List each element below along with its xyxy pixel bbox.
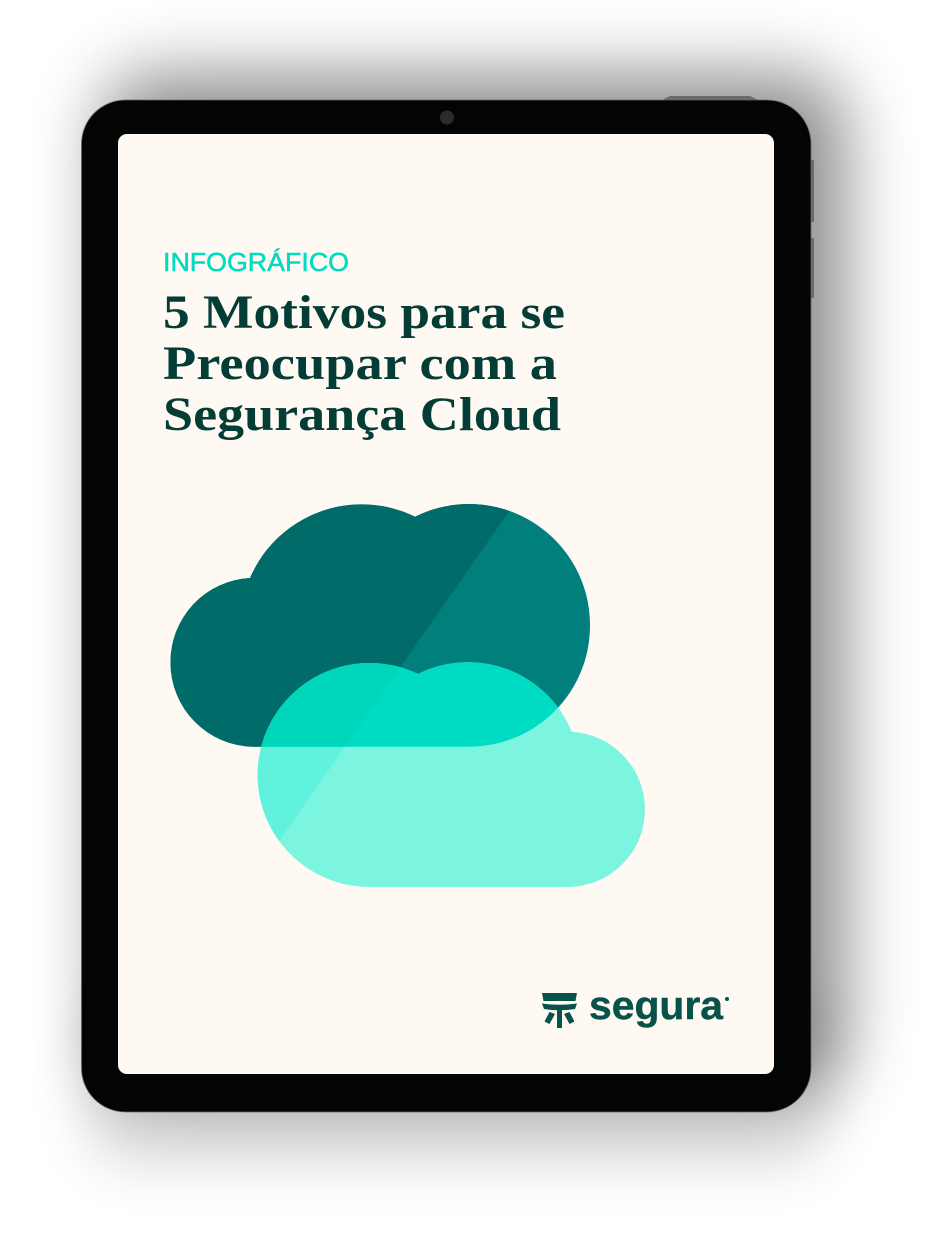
registered mark — [725, 997, 729, 1001]
title: Segurança Cloud — [163, 388, 561, 441]
cloud illustration — [170, 504, 645, 887]
title — [163, 286, 565, 441]
logo: segura — [542, 984, 729, 1028]
dark cloud — [170, 504, 590, 747]
label: infográfico: INFOGRÁFICO — [163, 247, 349, 277]
light cloud — [258, 662, 645, 887]
screen — [118, 134, 774, 1074]
camera — [440, 110, 454, 124]
tablet — [82, 96, 814, 1112]
title: Preocupar com a — [163, 337, 557, 390]
logo wordmark: segura — [589, 984, 724, 1028]
drop shadow — [85, 74, 845, 1165]
tablet body — [82, 100, 811, 1112]
title: 5 Motivos para se — [163, 286, 565, 339]
top button — [662, 96, 758, 100]
side buttons — [810, 160, 814, 298]
overlap — [261, 662, 558, 747]
logo icon — [542, 993, 577, 1028]
